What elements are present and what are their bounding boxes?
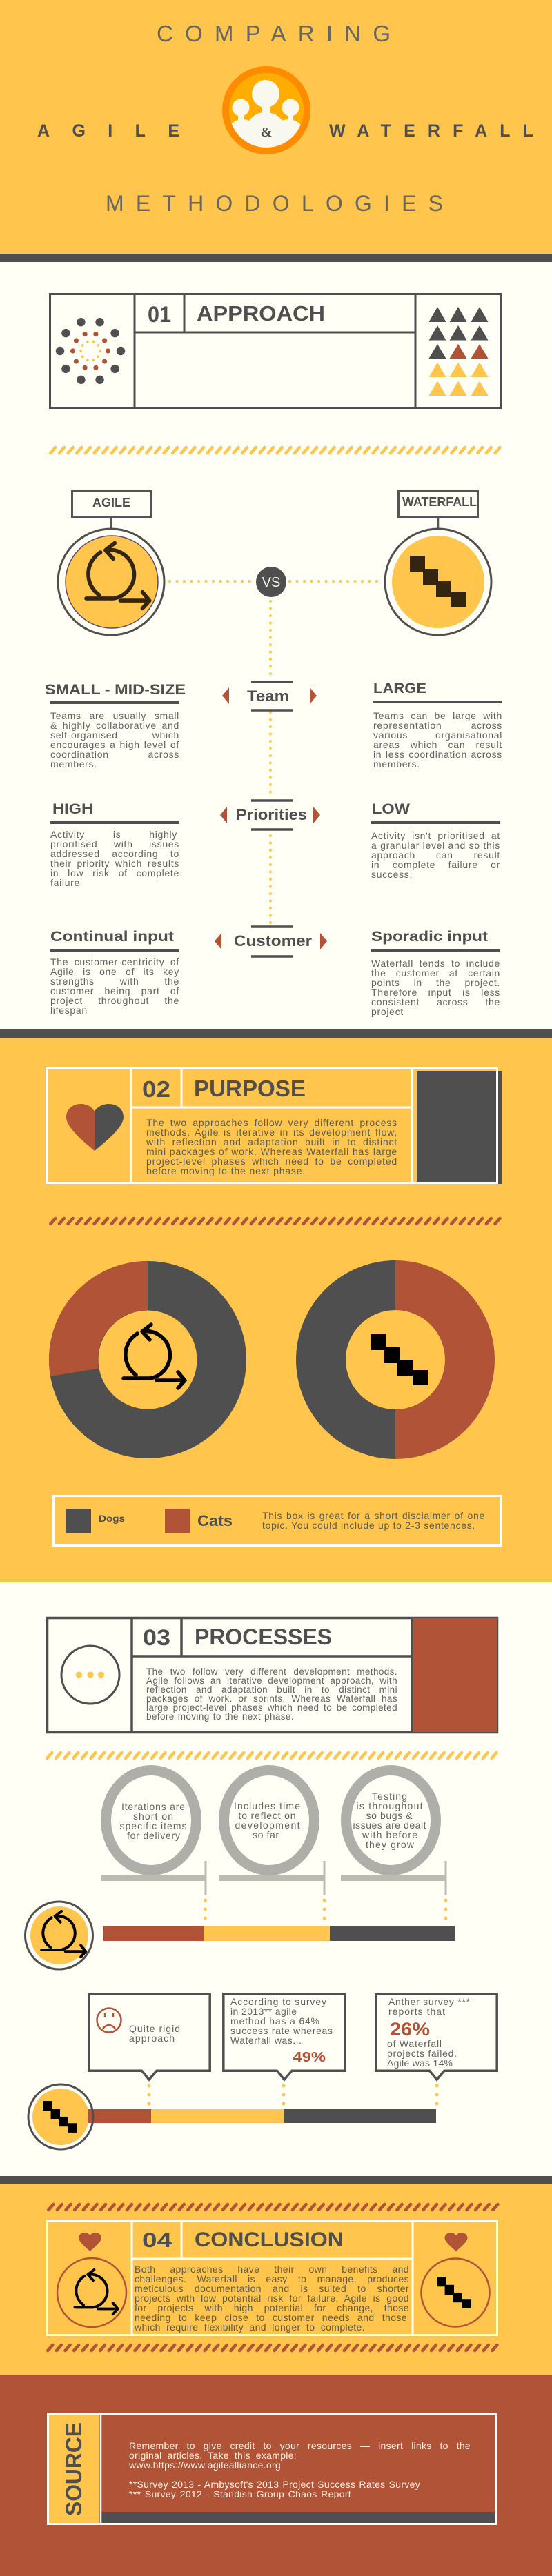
icon: waterfall steps badge: [385, 529, 491, 635]
icon: triangle grid: [429, 307, 489, 396]
conclusion text: which require flexibility and longer to complete.: [135, 2322, 365, 2333]
icon: team logo: &: [261, 125, 272, 140]
row label: priorities: [220, 801, 320, 829]
agile process timeline: [25, 1771, 455, 1969]
note: testing: with before: [362, 1829, 417, 1840]
note: reflection: [219, 1771, 326, 1895]
processes description: before moving to the next phase.: [146, 1711, 294, 1722]
callout: 26 percent: Agile was 14%: [387, 2057, 453, 2069]
icon: split heart: [66, 1104, 124, 1151]
waterfall priorities column: a granular level and so this: [371, 840, 500, 851]
waterfall team column: various organisational: [373, 729, 502, 741]
title: waterfall: WATERFALL: [329, 121, 533, 141]
agile team column: & highly collaborative and: [50, 720, 179, 731]
panel: source section: [0, 2375, 552, 2576]
note: reflection: Includes time: [234, 1800, 300, 1811]
callout: rigid approach: Quite rigid: [129, 2023, 180, 2034]
waterfall priorities column: approach can result: [371, 849, 500, 861]
note: iterations: Iterations are: [121, 1801, 185, 1812]
note: iterations: short on: [133, 1811, 173, 1822]
panel: 02 purpose header box: [47, 1068, 502, 1184]
agile team column: members.: [50, 758, 97, 769]
source credits: original articles. Take this example:: [129, 2450, 297, 2461]
agile team column: encourages a high level of: [50, 739, 179, 750]
agile label: [72, 491, 150, 529]
agile customer column: Agile is one of its key: [50, 966, 179, 977]
waterfall team column: areas which can result: [373, 739, 502, 750]
panel: 01 approach header box: [50, 294, 501, 408]
agile label: AGILE: [92, 496, 130, 510]
source credits: *** Survey 2012 - Standish Group Chaos Report: [129, 2488, 351, 2499]
source credits: [129, 2441, 474, 2507]
callout: 49 percent: method has a 64%: [230, 2015, 319, 2026]
vs badge: [256, 567, 286, 597]
agile priorities column: HIGH: [52, 801, 93, 817]
processes description: reflection and adaptation built in to distinct mini: [146, 1684, 397, 1695]
icon: dot burst: [56, 318, 125, 384]
waterfall customer column: the customer at certain: [371, 967, 500, 978]
agile priorities column: [50, 801, 181, 890]
conclusion text: meticulous documentation and is suited to shorter: [135, 2283, 409, 2294]
callout: 49 percent: According to survey: [230, 1996, 326, 2007]
processes description: [146, 1667, 400, 1724]
chart: waterfall donut: [296, 1260, 495, 1459]
heading: conclusion: CONCLUSION: [195, 2228, 344, 2251]
panel: purpose section background: [0, 1029, 552, 1582]
callout: 49 percent: success rate whereas: [230, 2025, 333, 2036]
panel: agile vs waterfall comparison: [45, 491, 504, 1019]
agile team column: SMALL - MID-SIZE: [45, 682, 186, 698]
header panel: [0, 0, 552, 262]
agile priorities column: in low risk of complete: [50, 867, 179, 878]
waterfall customer column: consistent across the: [371, 996, 500, 1007]
bar: waterfall timeline: [88, 2109, 436, 2123]
callout: 26 percent: [376, 1994, 497, 2080]
note: reflection: so far: [253, 1829, 279, 1840]
agile customer column: strengths with the: [50, 976, 179, 987]
processes description: packages of work. or sprints. Whereas Waterfall has: [146, 1693, 397, 1704]
callout: 49 percent: in 2013** agile: [230, 2006, 297, 2017]
section number 03: 03: [143, 1625, 170, 1650]
agile team column: [45, 682, 186, 772]
waterfall customer column: [371, 929, 502, 1019]
conclusion text: [135, 2264, 412, 2333]
heading: processes: PROCESSES: [195, 1624, 332, 1649]
callout: 26 percent: of Waterfall: [387, 2038, 442, 2049]
agile customer column: [50, 929, 181, 1018]
row label: team: Team: [247, 687, 289, 705]
bar: agile timeline: [103, 1926, 455, 1941]
purpose description: mini packages of work. Whereas Waterfall has large: [146, 1146, 397, 1157]
callout: 26 percent: reports that: [388, 2006, 445, 2017]
agile customer column: Continual input: [50, 929, 174, 945]
waterfall label: WATERFALL: [402, 495, 477, 509]
agile priorities column: their priority which results: [50, 858, 179, 869]
purpose description: [146, 1118, 400, 1178]
vs badge: VS: [262, 575, 280, 590]
icon: agile loop badge: [58, 529, 164, 635]
note: testing: so bugs &: [366, 1810, 413, 1821]
section number 04: 04: [142, 2229, 172, 2252]
legend label: dogs: Dogs: [99, 1513, 125, 1524]
icon: waterfall small badge: [28, 2084, 436, 2149]
title: agile: AGILE: [37, 121, 179, 141]
purpose description: project-level phases which need to be completed: [146, 1156, 397, 1167]
callout: 26 percent: Anther survey ***: [388, 1996, 471, 2007]
icon: waterfall heart badge: [421, 2233, 490, 2326]
callout: 26 percent: projects failed.: [387, 2048, 457, 2059]
source credits: www.https://www.agilealliance.org: [129, 2459, 281, 2471]
waterfall priorities column: in complete failure or: [371, 859, 500, 870]
icon: agile small badge: [25, 1902, 92, 1969]
note: iterations: [101, 1771, 207, 1895]
agile priorities column: addressed according to: [50, 848, 179, 859]
waterfall process timeline: [28, 1994, 497, 2149]
section number 02: 02: [142, 1076, 170, 1102]
heading: source: SOURCE: [61, 2422, 86, 2516]
row label: customer: [215, 927, 327, 956]
callout: 49 percent: Waterfall was...: [230, 2035, 302, 2046]
note: testing: Testing: [372, 1791, 407, 1802]
agile team column: coordination across: [50, 749, 179, 760]
waterfall label: [399, 491, 477, 529]
processes description: large project-level phases which need to be completed: [146, 1702, 397, 1713]
legend label: cats: Cats: [197, 1512, 233, 1529]
conclusion text: challenges. Waterfall is easy to manage, produces: [135, 2273, 409, 2284]
disclaimer: topic. You could include up to 2-3 sentences.: [262, 1520, 475, 1531]
waterfall customer column: points in the project.: [371, 977, 500, 988]
waterfall customer column: Sporadic input: [371, 929, 488, 945]
waterfall priorities column: success.: [371, 869, 413, 880]
callout: rigid approach: [89, 1994, 210, 2080]
04 conclusion box: [47, 2220, 497, 2335]
waterfall team column: members.: [373, 758, 420, 769]
heading: purpose: PURPOSE: [194, 1076, 306, 1101]
callout: rigid approach: approach: [129, 2033, 175, 2044]
note: testing: they grow: [366, 1839, 415, 1850]
icon: sad face: [97, 2008, 121, 2033]
callout: 49 percent: [224, 1994, 345, 2080]
note: iterations: for delivery: [127, 1830, 180, 1841]
icon: agile heart badge: [57, 2233, 126, 2327]
note: iterations: specific items: [120, 1820, 186, 1831]
waterfall customer column: Therefore input is less: [371, 987, 500, 998]
note: reflection: to reflect on: [239, 1810, 295, 1821]
note: testing: is throughout: [356, 1800, 423, 1811]
disclaimer: [262, 1511, 489, 1532]
note: reflection: development: [235, 1820, 300, 1831]
row label: customer: Customer: [234, 932, 312, 949]
waterfall priorities column: LOW: [372, 801, 410, 817]
waterfall team column: in less coordination across: [373, 749, 502, 760]
panel: 03 processes header box: [47, 1618, 497, 1733]
agile customer column: project throughout the: [50, 995, 179, 1006]
agile team column: self-organised which: [50, 729, 179, 741]
row label: priorities: Priorities: [236, 806, 307, 823]
panel: conclusion section: [0, 2176, 552, 2375]
waterfall priorities column: [371, 801, 502, 892]
waterfall team column: [373, 681, 504, 772]
agile customer column: customer being part of: [50, 985, 179, 996]
callout: 26 percent: 26%: [390, 2019, 430, 2040]
processes description: Agile follows an iterative development approach, with: [146, 1676, 397, 1686]
waterfall team column: representation across: [373, 720, 502, 731]
conclusion text: needing to keep close to customer needs and those: [135, 2312, 407, 2323]
purpose description: before moving to the next phase.: [146, 1165, 306, 1176]
note: testing: [341, 1771, 447, 1895]
legend swatch: cats: [165, 1509, 190, 1533]
waterfall customer column: project: [371, 1006, 404, 1017]
note: testing: issues are dealt: [353, 1820, 426, 1831]
conclusion text: projects with low potential risk for failure. Agile is good: [135, 2293, 409, 2304]
legend box: [54, 1496, 501, 1546]
legend swatch: dogs: [66, 1509, 91, 1533]
heading: approach: APPROACH: [197, 301, 325, 325]
conclusion text: for projects with high potential for change, those: [135, 2302, 409, 2313]
agile customer column: lifespan: [50, 1005, 88, 1016]
callout: 49 percent: 49%: [293, 2050, 326, 2065]
title: comparing: COMPARING: [157, 21, 391, 46]
title: methodologies: METHODOLOGIES: [106, 191, 443, 216]
source credits: **Survey 2013 - Ambysoft's 2013 Project Success Rates Survey: [129, 2479, 420, 2490]
waterfall team column: LARGE: [373, 681, 426, 696]
chart: agile donut: [49, 1261, 221, 1433]
section number 01: 01: [148, 302, 171, 327]
icon: team logo: [222, 66, 310, 154]
icon: ellipsis circle: [61, 1646, 119, 1704]
agile priorities column: prioritised with issues: [50, 838, 179, 849]
purpose description: methods. Agile is iterative in its development flow,: [146, 1127, 397, 1138]
purpose description: with reflection and adaptation built in to distinct: [146, 1136, 397, 1147]
agile priorities column: failure: [50, 877, 80, 888]
row label: team: [222, 682, 317, 710]
